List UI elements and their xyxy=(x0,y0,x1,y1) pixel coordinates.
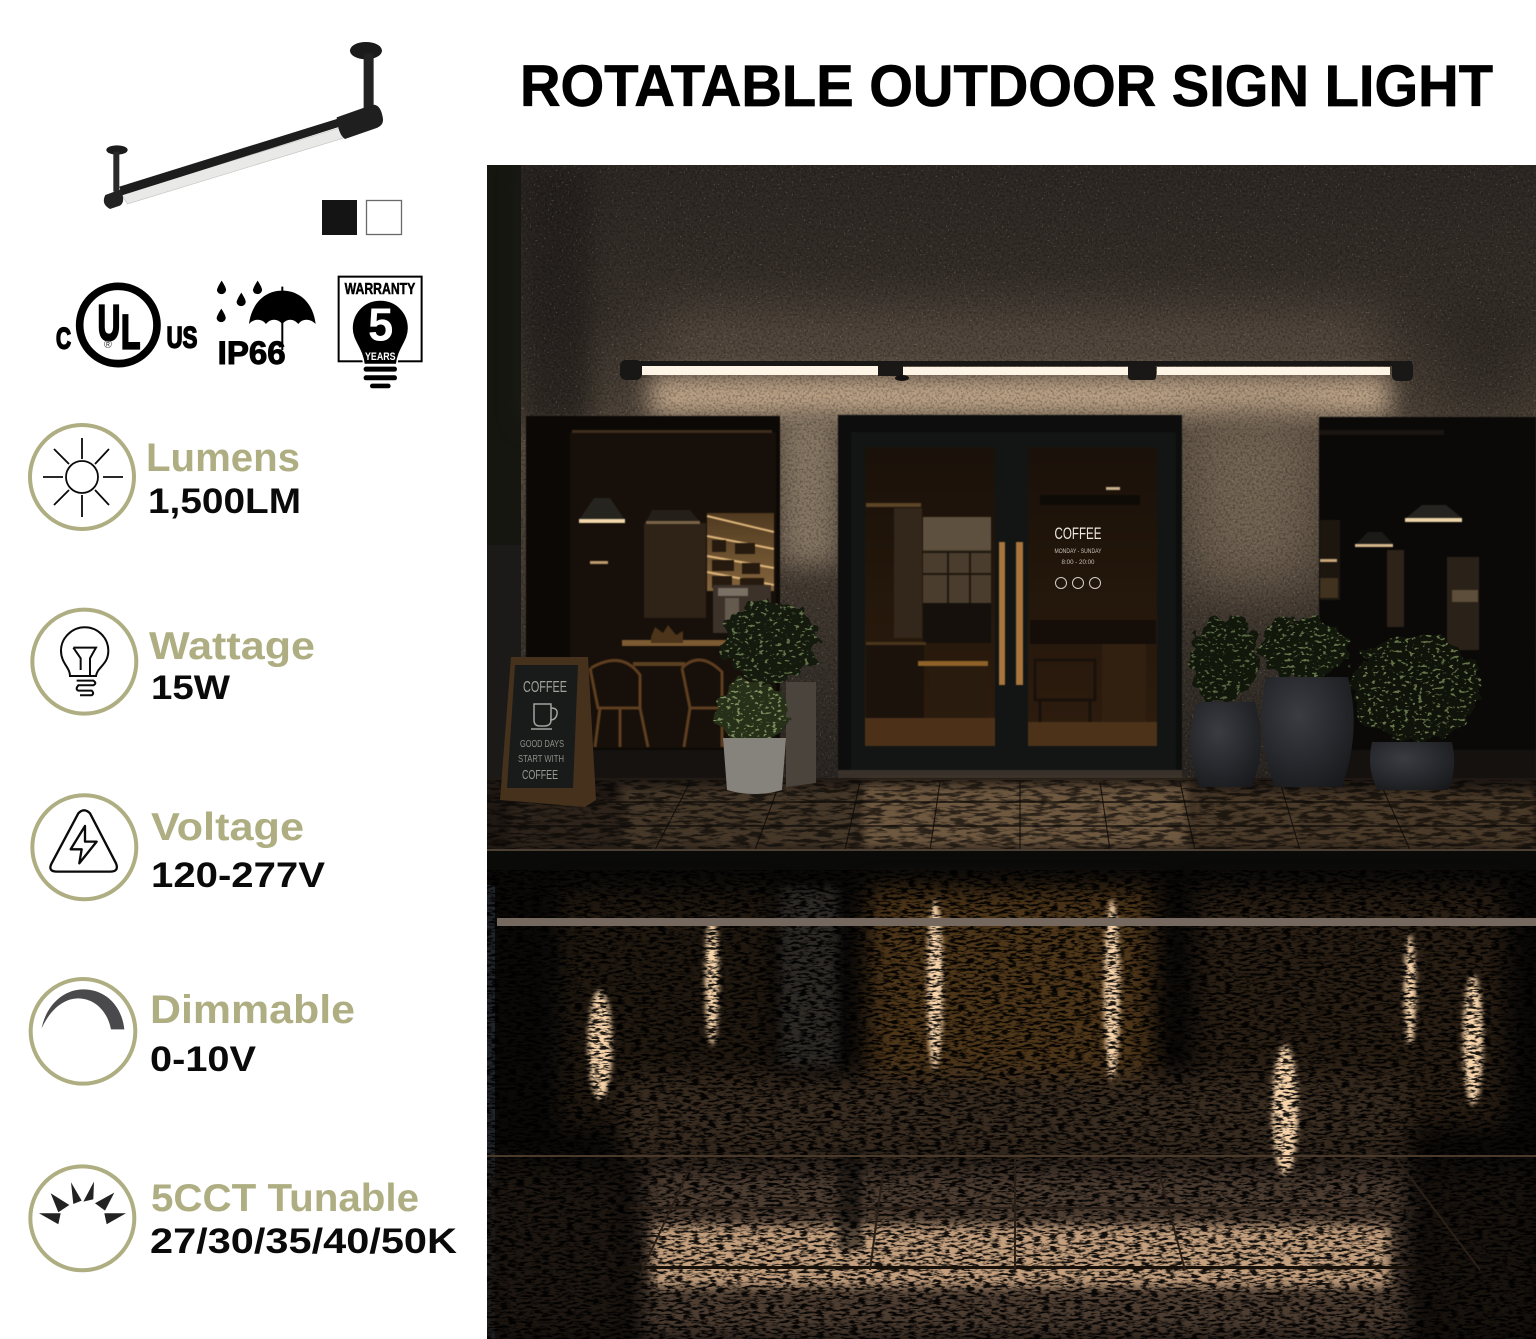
right door pane xyxy=(1028,447,1157,746)
icon: coffee cup xyxy=(531,704,557,729)
icon: 5 year warranty bulb: WARRANTY xyxy=(345,281,415,298)
door lettering: 8:00 - 20:00 xyxy=(1062,559,1095,566)
door reflection xyxy=(868,888,1154,1113)
icon: 5 year warranty bulb xyxy=(339,277,422,388)
right plant group xyxy=(1190,616,1479,790)
icon: 5 year warranty bulb: 5 xyxy=(368,299,393,351)
spec: voltage: Voltage xyxy=(151,806,304,849)
sidewalk water texture xyxy=(487,780,1536,852)
chalkboard sign: COFFEE xyxy=(522,767,558,782)
chalkboard sign: COFFEE xyxy=(523,679,567,696)
icon: sun xyxy=(30,425,134,529)
icon: IP66 rain umbrella: IP66 xyxy=(218,335,286,371)
icon: IP66 rain umbrella xyxy=(217,281,316,371)
left dim reflection xyxy=(560,890,775,1130)
spec: wattage xyxy=(32,610,315,714)
icon: cULus certification: U xyxy=(98,295,120,351)
wet street with reflections xyxy=(487,870,1536,1339)
chalkboard sign: START WITH xyxy=(518,753,564,765)
pillar reflection xyxy=(780,888,838,1068)
photo: coffee shop storefront at night in the rain xyxy=(487,165,1536,1339)
icon: light bulb xyxy=(32,610,136,714)
spec: lumens: Lumens xyxy=(146,436,300,480)
left door pane xyxy=(865,447,995,746)
road marking xyxy=(497,918,1536,926)
icon: 5 year warranty bulb: YEARS xyxy=(365,351,396,363)
left shop window xyxy=(526,416,780,782)
icon: high voltage triangle xyxy=(32,795,136,899)
spec: 5CCT tunable xyxy=(30,1166,457,1270)
spec: dimmable xyxy=(31,979,355,1084)
shop double door xyxy=(838,415,1182,778)
spec: wattage: Wattage xyxy=(149,625,315,668)
door lettering: COFFEE xyxy=(1054,524,1102,543)
mid band glow xyxy=(620,1075,1410,1160)
spec: voltage: 120-277V xyxy=(151,856,326,895)
icon: cULus certification xyxy=(56,286,197,364)
wet sidewalk xyxy=(487,778,1536,852)
spec: voltage xyxy=(32,795,326,899)
sign light bar on wall xyxy=(620,360,1413,381)
spec: 5CCT tunable: 5CCT Tunable xyxy=(151,1177,419,1220)
icon: cULus certification: ® xyxy=(104,339,112,351)
spec: dimmable: 0-10V xyxy=(150,1040,257,1079)
right dim reflection xyxy=(1195,888,1505,1128)
light streaks xyxy=(588,900,1483,1175)
lower tile glow xyxy=(640,1165,1410,1339)
left plant group xyxy=(715,602,818,794)
title: ROTATABLE OUTDOOR SIGN LIGHT xyxy=(520,54,1493,119)
curb xyxy=(492,851,1536,856)
spec: dimmable: Dimmable xyxy=(150,988,355,1032)
icon: dimmer arc xyxy=(31,979,135,1084)
trees at left edge xyxy=(487,165,523,805)
street water texture xyxy=(487,870,1536,1339)
door lettering: MONDAY - SUNDAY xyxy=(1054,548,1102,555)
icon: rising sun rays xyxy=(30,1166,134,1270)
spec: wattage: 15W xyxy=(151,669,231,707)
door lettering xyxy=(1054,524,1102,588)
product image: sign light fixture xyxy=(104,42,383,209)
bright band on tiles xyxy=(652,1225,1390,1287)
icon: cULus certification: L xyxy=(121,305,140,359)
spec: 5CCT tunable: 27/30/35/40/50K xyxy=(150,1222,457,1261)
spec: lumens xyxy=(30,425,301,529)
spec: lumens: 1,500LM xyxy=(148,482,301,521)
icon: cULus certification: C xyxy=(56,322,71,355)
door handles xyxy=(999,542,1023,685)
colour swatch: white xyxy=(366,200,402,234)
icon: cULus certification: US xyxy=(167,321,197,354)
colour swatch: black xyxy=(322,200,357,235)
building wall xyxy=(521,165,1536,790)
chalkboard sign xyxy=(500,657,596,807)
chalkboard sign: GOOD DAYS xyxy=(520,738,564,750)
right shop window xyxy=(1319,417,1536,780)
